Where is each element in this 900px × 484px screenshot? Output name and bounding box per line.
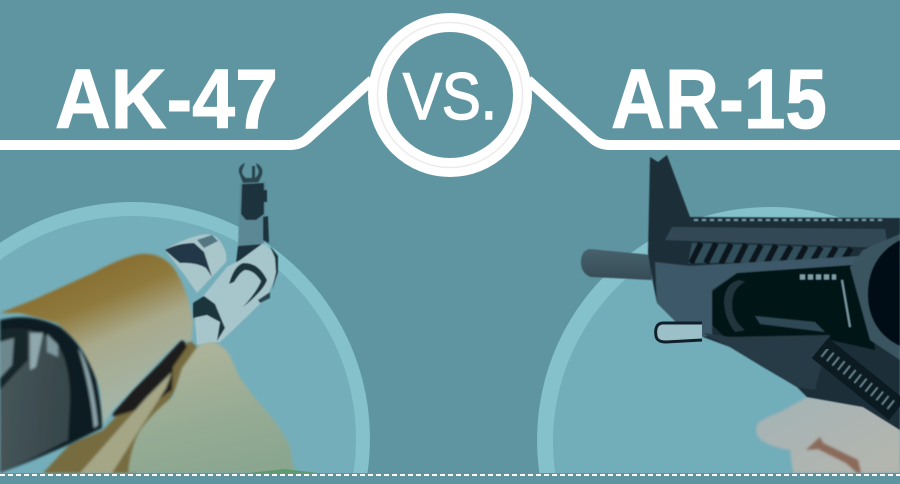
recess curve — [724, 280, 745, 332]
AR-15 hand — [756, 397, 900, 473]
AK-47 wooden handguard — [0, 254, 193, 428]
spring highlights — [824, 352, 895, 408]
slanted vents — [691, 243, 851, 264]
rear drum opening — [868, 240, 900, 346]
right circle backdrop — [537, 207, 900, 473]
AK-47 supporting hand — [128, 342, 295, 473]
grey hand guard panel — [655, 256, 860, 337]
barrel recess — [712, 264, 875, 350]
lower handguard ridge — [703, 333, 830, 390]
AK-47 lower wood and shadow seam — [43, 338, 200, 473]
panel: AR-15 image — [537, 155, 900, 473]
AK-47 gas block and barrel — [165, 234, 278, 345]
thin rod — [842, 280, 850, 327]
right connector — [528, 80, 900, 145]
panel: AK-47 image — [0, 163, 370, 473]
body silhouette — [648, 155, 900, 430]
VS text: VS. — [403, 59, 497, 133]
rail teeth — [694, 219, 884, 221]
rear drum — [850, 234, 900, 360]
AR-15 bipod loop — [656, 323, 702, 342]
VS badge ring — [378, 22, 522, 168]
left circle backdrop — [0, 202, 370, 473]
AR-15 coiled spring grip — [820, 348, 897, 410]
sight pin strip — [800, 274, 836, 280]
lower rod — [755, 316, 825, 332]
title: AR-15: AR-15 — [611, 52, 827, 146]
AK-47 front sight post — [236, 163, 269, 263]
left connector — [0, 80, 372, 145]
vent band — [688, 243, 852, 263]
VS inner ring detail — [378, 22, 522, 168]
AK-47 rear stock cap — [0, 317, 102, 473]
finger crease — [806, 437, 861, 473]
title: AK-47: AK-47 — [55, 52, 278, 146]
AR-15 body — [648, 155, 900, 430]
AR-15 muzzle — [581, 249, 652, 280]
connector line with VS badge — [0, 22, 900, 168]
green sleeve — [248, 469, 318, 473]
upper rail — [665, 227, 888, 248]
dashed divider — [0, 474, 900, 476]
